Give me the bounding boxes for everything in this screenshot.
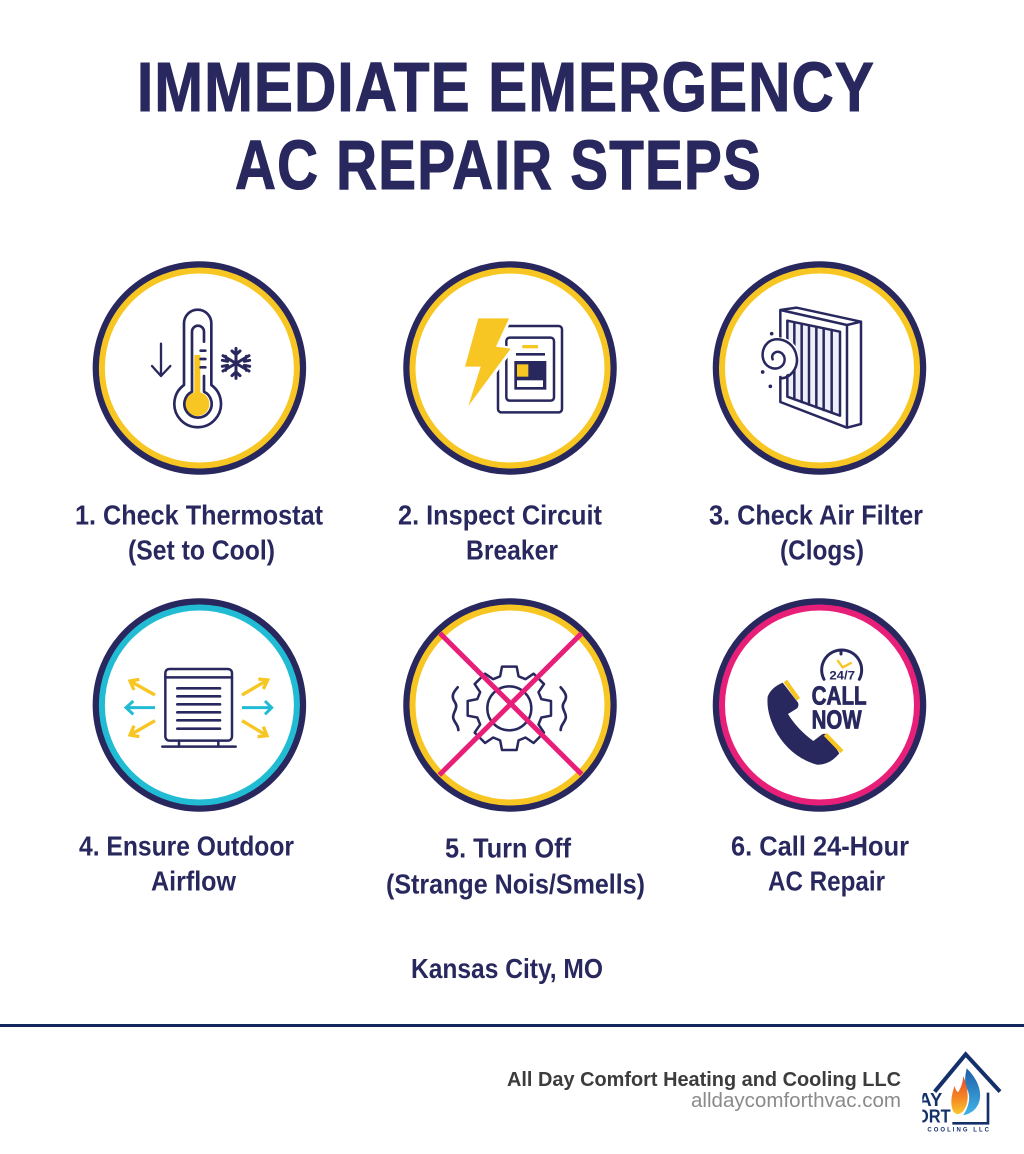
footer company name: All Day Comfort Heating and Cooling LLC	[507, 1069, 901, 1091]
step 2 label	[398, 500, 602, 566]
step 3 label	[709, 500, 923, 566]
step 3 icon: clogged air filter	[716, 264, 923, 472]
step 3 label: 3. Check Air Filter	[709, 500, 923, 530]
step 6 label	[731, 830, 909, 896]
company logo	[916, 1054, 1000, 1133]
step 2 label: Breaker	[466, 534, 558, 566]
step 5 label: (Strange Nois/Smells)	[386, 868, 645, 900]
step 6 icon: phone with call now	[716, 602, 923, 808]
step 1 label: 1. Check Thermostat	[75, 500, 323, 530]
title: IMMEDIATE EMERGENCY	[137, 48, 875, 126]
step 6 icon: phone with call now: NOW	[812, 704, 862, 734]
step 1 icon: thermometer in circle	[96, 264, 303, 472]
company logo: AY	[918, 1089, 943, 1110]
footer divider	[0, 1024, 1024, 1027]
step 4 label: 4. Ensure Outdoor	[79, 830, 294, 862]
company logo: COOLING LLC	[927, 1127, 990, 1133]
step 6 icon: phone with call now: CALL	[812, 680, 867, 710]
step 6 label: AC Repair	[768, 866, 885, 896]
title: AC REPAIR STEPS	[235, 126, 762, 204]
step 5 icon: crossed-out gear with vibration	[406, 602, 614, 808]
step 6 label: 6. Call 24-Hour	[731, 830, 909, 862]
step 5 label	[386, 832, 645, 900]
step 4 icon: outdoor unit with airflow arrows	[96, 602, 303, 808]
step 2 icon: lightning bolt and breaker panel	[406, 264, 614, 472]
step 1 label: (Set to Cool)	[128, 534, 275, 566]
footer website: alldaycomforthvac.com	[691, 1090, 901, 1112]
step 4 label	[79, 830, 294, 896]
step 6 icon: phone with call now: 24/7	[829, 668, 855, 682]
step 2 label: 2. Inspect Circuit	[398, 500, 602, 530]
step 3 label: (Clogs)	[780, 534, 864, 566]
step 4 label: Airflow	[151, 866, 236, 896]
title	[137, 48, 875, 204]
location text: Kansas City, MO	[411, 953, 603, 984]
step 1 label	[75, 500, 323, 566]
step 5 label: 5. Turn Off	[445, 832, 572, 864]
company logo: ORT	[916, 1106, 951, 1127]
